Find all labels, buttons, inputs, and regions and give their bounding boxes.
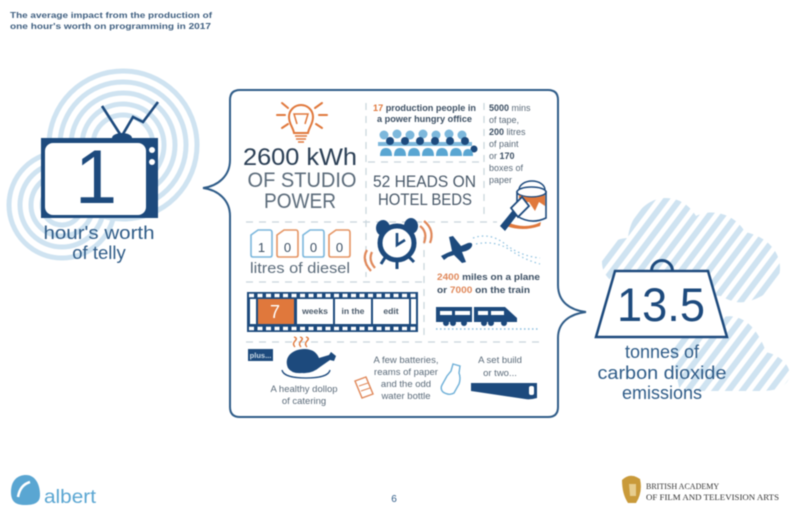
label: tonnes of carbon dioxide emissions: tonnes of <box>625 342 700 362</box>
plus label: plus... <box>250 351 271 360</box>
text: litres of diesel: litres of diesel <box>250 260 350 277</box>
text: miles on plane or train: 2400 miles on a plane <box>437 272 540 282</box>
text: 2600 kWh of studio power: 2600 kWh <box>243 144 357 171</box>
title: The average impact from the production of <box>10 10 212 20</box>
icon: crowd of people <box>378 130 478 156</box>
text: tape, paint, paper: of tape, <box>489 115 519 125</box>
icon: aeroplane with trail <box>441 236 540 264</box>
text: 52 heads on hotel beds: HOTEL BEDS <box>378 190 472 209</box>
icon: drinks can <box>355 377 373 398</box>
panel outline <box>203 90 586 417</box>
icon: television: 1 <box>75 135 117 220</box>
text: batteries, paper, water bottle: and the odd <box>381 379 431 390</box>
text: 2600 kWh of studio power: POWER <box>264 190 336 213</box>
logo: albert <box>11 475 97 508</box>
icon: jerry cans 1000: 0 <box>284 240 291 255</box>
icon: television <box>41 102 158 220</box>
text: a set build or two: or two... <box>483 368 517 379</box>
plus label <box>248 349 273 361</box>
text: healthy dollop of catering: A healthy dollop <box>270 384 338 395</box>
icon: water bottle <box>441 364 460 394</box>
page number: 6 <box>391 494 397 505</box>
label: hour's worth of telly: of telly <box>72 242 126 263</box>
text: 2600 kWh of studio power: OF STUDIO <box>248 169 356 192</box>
text: batteries, paper, water bottle: reams of paper <box>374 367 438 378</box>
icon: light bulb <box>277 103 327 142</box>
logo: albert: albert <box>44 487 97 508</box>
text: 52 heads on hotel beds <box>373 172 476 209</box>
film strip: 7 weeks in the edit: weeks <box>301 306 328 316</box>
film strip: 7 weeks in the edit <box>247 292 418 332</box>
film strip: 7 weeks in the edit: edit <box>383 306 399 316</box>
title: one hour's worth on programming in 2017 <box>10 21 211 31</box>
icon: jerry cans 1000: 1 <box>258 240 265 255</box>
icon: saw <box>471 383 537 399</box>
logo: BAFTA: OF FILM AND TELEVISION ARTS <box>646 493 779 502</box>
icon: jerry cans 1000: 0 <box>310 240 317 255</box>
text: tape, paint, paper <box>489 103 531 185</box>
text: tape, paint, paper: or 170 <box>489 151 515 161</box>
label: tonnes of carbon dioxide emissions: emissions <box>622 383 702 403</box>
text: 17 production people: a power hungry office <box>377 114 472 124</box>
text: a set build or two <box>478 355 522 379</box>
logo: BAFTA <box>622 476 779 503</box>
text: tape, paint, paper: 200 litres <box>489 127 526 137</box>
icon: paint can and brush <box>500 181 546 231</box>
icon: jerry cans 1000: 0 <box>336 240 343 255</box>
text: tape, paint, paper: 5000 mins <box>489 103 531 113</box>
text: 17 production people <box>373 103 476 124</box>
label: tonnes of carbon dioxide emissions: carbon dioxide <box>598 363 726 383</box>
text: 52 heads on hotel beds: 52 HEADS ON <box>373 172 476 191</box>
icon: roast chicken with steam <box>282 337 336 378</box>
logo: BAFTA: BRITISH ACADEMY <box>646 482 719 491</box>
label: hour's worth of telly <box>44 222 154 263</box>
text: 17 production people: 17 production people in <box>373 103 476 113</box>
text: batteries, paper, water bottle: water bottle <box>380 391 431 402</box>
text: miles on plane or train <box>437 272 540 295</box>
text: batteries, paper, water bottle <box>374 355 438 402</box>
text: tape, paint, paper: boxes of <box>489 163 524 173</box>
film strip: 7 weeks in the edit: in the <box>342 306 365 316</box>
concentric signal rings <box>9 71 197 258</box>
label: tonnes of carbon dioxide emissions <box>598 342 726 403</box>
film strip: 7 weeks in the edit: 7 <box>270 302 280 322</box>
icon: alarm clock <box>365 218 432 271</box>
striped clouds <box>602 198 790 391</box>
title <box>10 10 212 31</box>
icon: jerry cans 1000 <box>251 230 350 257</box>
icon: train <box>436 307 540 329</box>
icon: weight 13.5: 13.5 <box>617 278 705 331</box>
text: batteries, paper, water bottle: A few batteries, <box>374 355 438 366</box>
text: a set build or two: A set build <box>478 355 522 366</box>
icon: weight 13.5 <box>596 260 727 337</box>
text: miles on plane or train: or 7000 on the train <box>437 285 530 295</box>
text: 2600 kWh of studio power <box>243 144 357 213</box>
text: healthy dollop of catering <box>270 384 338 407</box>
text: tape, paint, paper: of paint <box>489 139 519 149</box>
text: healthy dollop of catering: of catering <box>282 396 326 407</box>
label: hour's worth of telly: hour's worth <box>44 222 154 243</box>
text: tape, paint, paper: paper <box>489 175 512 185</box>
